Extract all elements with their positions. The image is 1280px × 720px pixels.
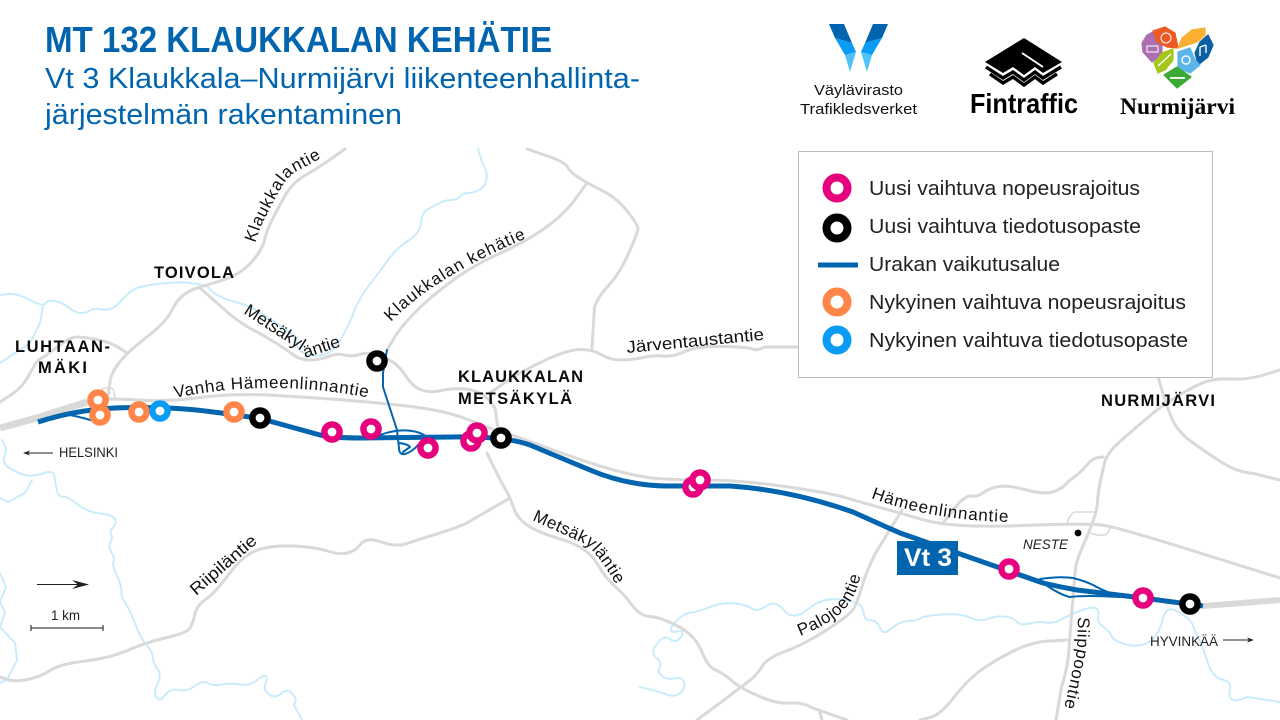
road name: Hämeenlinnantie: Hämeenlinnantie bbox=[872, 487, 1008, 522]
road sign: Vt 3: Vt 3 bbox=[904, 544, 952, 572]
place name: Nurmijärvi: NURMIJÄRVI bbox=[1101, 392, 1215, 410]
subtitle: järjestelmän rakentaminen bbox=[44, 99, 402, 131]
road name: Vanha Hämeenlinnantie: Vanha Hämeenlinnantie bbox=[172, 376, 368, 397]
service station: Neste bbox=[1023, 530, 1081, 552]
destination: Hyvinkää with arrow: HYVINKÄÄ bbox=[1150, 633, 1219, 649]
logo: Väylävirasto Trafikledsverket bbox=[800, 24, 918, 118]
legend panel bbox=[798, 152, 1212, 378]
marker: current variable information sign bbox=[152, 403, 168, 419]
destination: Helsinki with arrow: HELSINKI bbox=[59, 444, 118, 460]
north arrow bbox=[37, 580, 89, 589]
markers: new variable information signs bbox=[252, 353, 1198, 612]
logo: Nurmijärvi bbox=[1120, 27, 1236, 119]
connecting and ramp lines in project area bbox=[70, 350, 1120, 597]
destination: Hyvinkää with arrow bbox=[1150, 633, 1254, 649]
road name: Riipiläntie: Riipiläntie bbox=[186, 531, 261, 599]
logo: Fintraffic bbox=[970, 38, 1078, 119]
place name: Luhtaanmäki: MÄKI bbox=[38, 359, 87, 377]
legend: new information sign: Uusi vaihtuva tiedotusopaste bbox=[869, 216, 1141, 238]
road name: Palojoentie: Palojoentie bbox=[797, 575, 860, 636]
place name: Klaukkalan Metsäkylä: KLAUKKALAN bbox=[458, 368, 583, 386]
rivers bbox=[0, 149, 1280, 720]
markers: new variable speed limits bbox=[324, 421, 1151, 606]
road name: Siippoontie: Siippoontie bbox=[1065, 618, 1090, 708]
destination: Helsinki with arrow bbox=[23, 444, 118, 460]
road name: Järventaustantie: Järventaustantie bbox=[626, 325, 765, 357]
place name: Klaukkalan Metsäkylä: METSÄKYLÄ bbox=[458, 390, 572, 408]
logo: Fintraffic: Fintraffic bbox=[970, 88, 1078, 119]
logo: Väylävirasto Trafikledsverket: Trafikledsverket bbox=[800, 101, 918, 118]
legend: current speed limit: Nykyinen vaihtuva nopeusrajoitus bbox=[869, 292, 1186, 314]
subtitle: Vt 3 Klaukkala–Nurmijärvi liikenteenhallinta- bbox=[45, 63, 640, 95]
road name: Metsäkyläntie north: Metsäkyl bbox=[241, 300, 309, 354]
scale bar: 1 km bbox=[31, 607, 103, 631]
motorway west of the project area bbox=[0, 402, 87, 428]
legend: current information sign: Nykyinen vaihtuva tiedotusopaste bbox=[869, 330, 1188, 352]
legend: new speed limit: Uusi vaihtuva nopeusrajoitus bbox=[869, 178, 1140, 200]
scale bar: 1 km: 1 km bbox=[51, 607, 80, 623]
title: MT 132 KLAUKKALAN KEHÄTIE bbox=[45, 19, 552, 60]
road network bbox=[0, 149, 1280, 720]
road name: Klaukkalan kehätie: Klaukkalan kehätie bbox=[384, 231, 524, 321]
legend: project impact area: Urakan vaikutusalue bbox=[869, 254, 1060, 276]
place name: Toivola: TOIVOLA bbox=[154, 264, 234, 282]
road name: Klaukkalantie: Klaukkalantie bbox=[244, 152, 320, 242]
road name: Metsäkyläntie north bbox=[241, 300, 342, 362]
logo: Väylävirasto Trafikledsverket: Väylävirasto bbox=[814, 82, 903, 99]
road sign: Vt 3 bbox=[897, 541, 958, 575]
main project line: Urakan vaikutusalue bbox=[38, 408, 1203, 606]
motorway east of the project area bbox=[1203, 600, 1280, 606]
road name: Metsäkyläntie north: äntie bbox=[300, 332, 342, 362]
logo: Nurmijärvi: Nurmijärvi bbox=[1120, 94, 1236, 119]
markers: current variable speed limits bbox=[90, 392, 242, 423]
service station: Neste: NESTE bbox=[1023, 536, 1069, 552]
road name: Metsäkyläntie south: Metsäkyläntie bbox=[533, 510, 622, 583]
place name: Luhtaanmäki: LUHTAAN- bbox=[15, 338, 110, 356]
